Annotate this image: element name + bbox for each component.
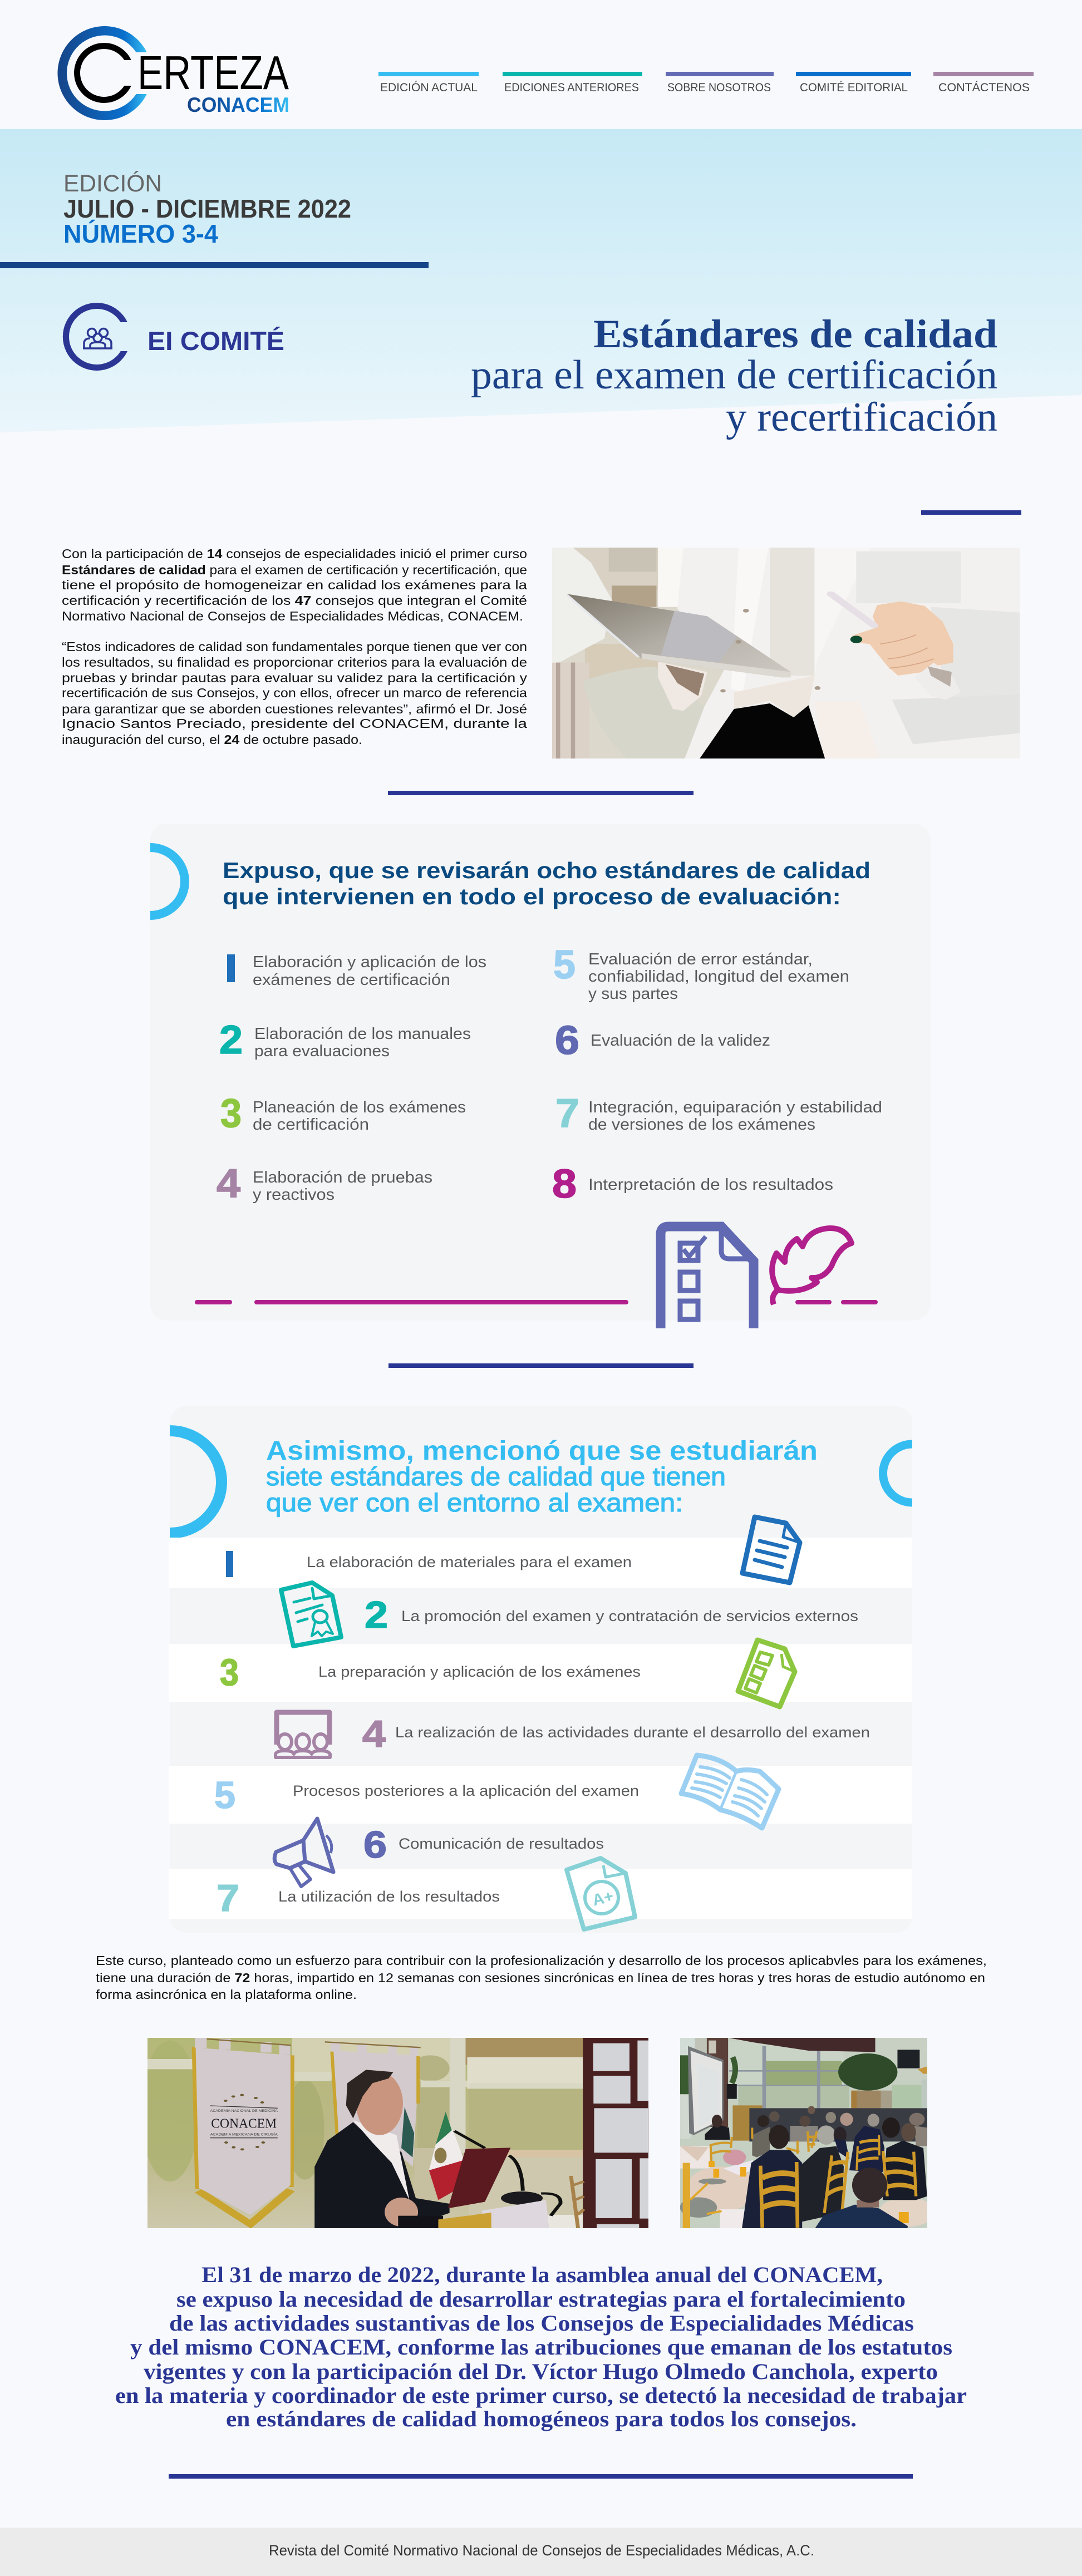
course text block bbox=[96, 1953, 987, 2002]
icon: A+ document: A+ bbox=[591, 1887, 616, 1910]
intro text block: los resultados, su finalidad es proporcionar criterios para la evaluación de bbox=[62, 655, 527, 669]
standard 1: 1 bbox=[219, 947, 241, 991]
row 4: La realización de las actividades durante el desarrollo del examen bbox=[395, 1724, 870, 1741]
icon: open book bbox=[681, 1755, 779, 1828]
standard 8: 8 bbox=[552, 1162, 577, 1206]
standard 6: 6 bbox=[555, 1018, 579, 1063]
row 7 bbox=[217, 1877, 500, 1919]
logo: Certeza CONACEM bbox=[57, 26, 289, 120]
intro text block bbox=[62, 546, 528, 747]
panel heading: siete estándares de calidad que tienen bbox=[266, 1462, 726, 1491]
footer: Revista del Comité Normativo Nacional de Consejos de Especialidades Médicas, A.C. bbox=[269, 2542, 814, 2559]
panel heading bbox=[266, 1436, 818, 1517]
intro text block: tiene el propósito de homogeneizar en calidad los exámenes para la bbox=[62, 578, 527, 592]
standard 3: de certificación bbox=[253, 1116, 369, 1134]
row 7: 7 bbox=[217, 1877, 239, 1919]
intro text block: Estándares de calidad para el examen de certificación y recertificación, que bbox=[62, 563, 527, 577]
intro text block: para garantizar que se aborden cuestiones relevantes”, afirmó el Dr. José bbox=[62, 702, 527, 716]
icon: megaphone bbox=[274, 1819, 333, 1887]
standard 1 bbox=[227, 954, 486, 985]
section badge: El Comité: EI COMITÉ bbox=[147, 326, 284, 356]
banner: CONACEM bbox=[194, 2038, 292, 2224]
panel: ocho estándares bbox=[150, 824, 931, 1328]
banner: CONACEM: CONACEM bbox=[211, 2116, 277, 2131]
navigation menu: EDICIONES ANTERIORES bbox=[504, 81, 639, 94]
banner: CONACEM: ACADEMIA NACIONAL DE MEDICINA bbox=[210, 2109, 278, 2112]
glasses of juice bbox=[709, 2161, 909, 2223]
logo: Certeza CONACEM: ERTEZA bbox=[137, 47, 289, 100]
row 6: Comunicación de resultados bbox=[399, 1835, 604, 1852]
intro text block: Normativo Nacional de Consejos de Especialidades Médicas, CONACEM. bbox=[62, 609, 523, 623]
standard 5: y sus partes bbox=[588, 985, 678, 1003]
closing statement: El 31 de marzo de 2022, durante la asamblea anual del CONACEM, bbox=[201, 2262, 883, 2287]
course text block: tiene una duración de 72 horas, impartido en 12 semanas con sesiones sincrónicas en línea de tres horas y tres horas de estudio autónomo en bbox=[96, 1971, 985, 1985]
closing statement: en estándares de calidad homogéneos para todos los consejos. bbox=[226, 2406, 857, 2431]
closing statement: y del mismo CONACEM, conforme las atribuciones que emanan de los estatutos bbox=[130, 2334, 952, 2360]
course text block: Este curso, planteado como un esfuerzo para contribuir con la profesionalización y desarrollo de los procesos aplicabvles para los exámenes, bbox=[96, 1953, 987, 1968]
section badge: El Comité bbox=[63, 303, 284, 371]
row 5: 5 bbox=[214, 1774, 235, 1816]
standard 7 bbox=[555, 1091, 882, 1136]
row 4 bbox=[362, 1713, 870, 1755]
panel heading: Expuso, que se revisarán ocho estándares de calidad bbox=[223, 858, 870, 883]
standard 4: y reactivos bbox=[253, 1186, 335, 1204]
projection screen bbox=[688, 2046, 724, 2135]
standard 7: Integración, equiparación y estabilidad bbox=[588, 1099, 882, 1116]
icon: document bbox=[742, 1517, 800, 1583]
standard 3 bbox=[220, 1091, 466, 1136]
standard 2: 2 bbox=[219, 1018, 243, 1062]
row 5 bbox=[214, 1774, 639, 1816]
standard 3: Planeación de los exámenes bbox=[253, 1099, 466, 1116]
panel: siete estándares bbox=[169, 1406, 912, 1933]
white row stripes bbox=[169, 1538, 912, 1919]
row 1: La elaboración de materiales para el examen bbox=[307, 1554, 632, 1570]
navigation menu: EDICIÓN ACTUAL bbox=[380, 81, 478, 94]
flag of Mexico bbox=[429, 2112, 473, 2200]
edition block bbox=[63, 170, 351, 248]
photo: speaker at lectern bbox=[147, 2038, 648, 2228]
standard 4: 4 bbox=[217, 1161, 240, 1206]
standard 8: Interpretación de los resultados bbox=[588, 1176, 833, 1194]
edition block: NÚMERO 3-4 bbox=[63, 219, 218, 248]
standard 4 bbox=[217, 1161, 432, 1206]
standard 7: 7 bbox=[555, 1091, 579, 1136]
icon: audience and screen bbox=[276, 1712, 330, 1757]
intro text block: certificación y recertificación de los 47 consejos que integran el Comité bbox=[62, 593, 527, 608]
standard 6 bbox=[555, 1018, 770, 1063]
intro text block: “Estos indicadores de calidad son fundamentales porque tienen que ver con bbox=[62, 639, 527, 654]
icon: committee bbox=[63, 303, 127, 371]
panel heading: que intervienen en todo el proceso de evaluación: bbox=[223, 884, 841, 909]
standard 4: Elaboración de pruebas bbox=[253, 1169, 432, 1186]
icon: A+ document bbox=[567, 1858, 635, 1929]
row 2: La promoción del examen y contratación de servicios externos bbox=[401, 1608, 858, 1624]
title bbox=[471, 312, 997, 440]
icon: certificate bbox=[281, 1583, 341, 1646]
standard 5 bbox=[553, 943, 849, 1003]
row 4: 4 bbox=[362, 1713, 386, 1755]
intro text block: Ignacio Santos Preciado, presidente del CONACEM, durante la bbox=[62, 716, 527, 731]
title: y recertificación bbox=[726, 395, 997, 440]
standard 7: de versiones de los exámenes bbox=[588, 1116, 815, 1134]
row 7: La utilización de los resultados bbox=[278, 1888, 500, 1905]
yellow ladder-back chairs bbox=[686, 2127, 916, 2228]
row 2 bbox=[365, 1594, 858, 1636]
edition block: JULIO - DICIEMBRE 2022 bbox=[63, 194, 351, 223]
course text block: forma asincrónica en la plataforma online. bbox=[96, 1987, 357, 2002]
title: Estándares de calidad bbox=[593, 312, 997, 356]
standard 2: para evaluaciones bbox=[254, 1042, 390, 1060]
photo: doctor with tablet bbox=[552, 548, 1020, 758]
standard 5: Evaluación de error estándar, bbox=[588, 950, 813, 968]
standard 5: 5 bbox=[553, 943, 576, 987]
closing statement bbox=[115, 2262, 967, 2431]
man speaking bbox=[314, 2070, 450, 2228]
intro text block: recertificación de sus Consejos, y con ellos, ofrecer un marco de referencia bbox=[62, 686, 527, 700]
icon: green checklist bbox=[738, 1640, 795, 1707]
row 6 bbox=[363, 1824, 604, 1866]
row 5: Procesos posteriores a la aplicación del examen bbox=[293, 1782, 639, 1799]
standard 2: Elaboración de los manuales bbox=[254, 1025, 471, 1043]
navigation menu bbox=[378, 72, 1034, 94]
top header with logo and navigation bbox=[57, 26, 1034, 120]
logo: Certeza CONACEM: CONACEM bbox=[187, 93, 289, 116]
arc decoration left bbox=[170, 1431, 222, 1533]
row 3: 3 bbox=[220, 1651, 239, 1693]
closing statement: en la materia y coordinador de este primer curso, se detectó la necesidad de trabajar bbox=[115, 2383, 967, 2408]
guests seen from behind bbox=[742, 2123, 927, 2228]
row 1 bbox=[226, 1551, 631, 1577]
panel heading bbox=[223, 858, 870, 909]
dark wood door bbox=[583, 2038, 648, 2228]
row 3 bbox=[220, 1651, 641, 1693]
seated guests bbox=[705, 2106, 927, 2158]
footer bbox=[0, 2528, 1082, 2576]
edition block: EDICIÓN bbox=[63, 170, 162, 197]
panel heading: que ver con el entorno al examen: bbox=[266, 1488, 683, 1517]
standard 6: Evaluación de la validez bbox=[591, 1032, 770, 1050]
arc decoration right bbox=[883, 1444, 912, 1503]
navigation menu: SOBRE NOSOTROS bbox=[667, 81, 771, 94]
standard 1: Elaboración y aplicación de los bbox=[253, 953, 486, 971]
standard 1: exámenes de certificación bbox=[253, 971, 450, 989]
banner: CONACEM: ACADEMIA MEXICANA DE CIRUGÍA bbox=[210, 2132, 278, 2136]
standard 5: confiabilidad, longitud del examen bbox=[588, 968, 849, 986]
closing statement: vigentes y con la participación del Dr. Víctor Hugo Olmedo Canchola, experto bbox=[144, 2359, 938, 2384]
standard 8 bbox=[552, 1162, 833, 1206]
row 2: 2 bbox=[365, 1594, 388, 1636]
panel heading: Asimismo, mencionó que se estudiarán bbox=[266, 1436, 818, 1466]
icon: feather quill bbox=[772, 1228, 852, 1304]
standard 2 bbox=[219, 1018, 471, 1062]
dashed magenta line bbox=[195, 1300, 878, 1304]
intro text block: pruebas y brindar pautas para evaluar su validez para la certificación y bbox=[62, 671, 528, 685]
navigation menu: CONTÁCTENOS bbox=[938, 81, 1030, 94]
intro text block: inauguración del curso, el 24 de octubre pasado. bbox=[62, 732, 362, 747]
closing statement: de las actividades sustantivas de los Consejos de Especialidades Médicas bbox=[169, 2311, 914, 2336]
icon: checklist document bbox=[661, 1227, 754, 1328]
arc decoration bbox=[150, 848, 185, 915]
closing statement: se expuso la necesidad de desarrollar estrategias para el fortalecimiento bbox=[176, 2287, 906, 2312]
photo: assembly in dining room bbox=[680, 2038, 927, 2228]
row 6: 6 bbox=[363, 1824, 387, 1866]
row 1: 1 bbox=[218, 1543, 239, 1585]
tables bbox=[680, 2146, 935, 2228]
navigation menu: COMITÉ EDITORIAL bbox=[800, 81, 908, 94]
light blue hero band bbox=[0, 129, 1082, 432]
title: para el examen de certificación bbox=[471, 352, 997, 398]
intro text block: Con la participación de 14 consejos de especialidades inició el primer curso bbox=[62, 546, 527, 561]
standard 3: 3 bbox=[220, 1091, 242, 1136]
row 3: La preparación y aplicación de los exámenes bbox=[318, 1663, 641, 1680]
